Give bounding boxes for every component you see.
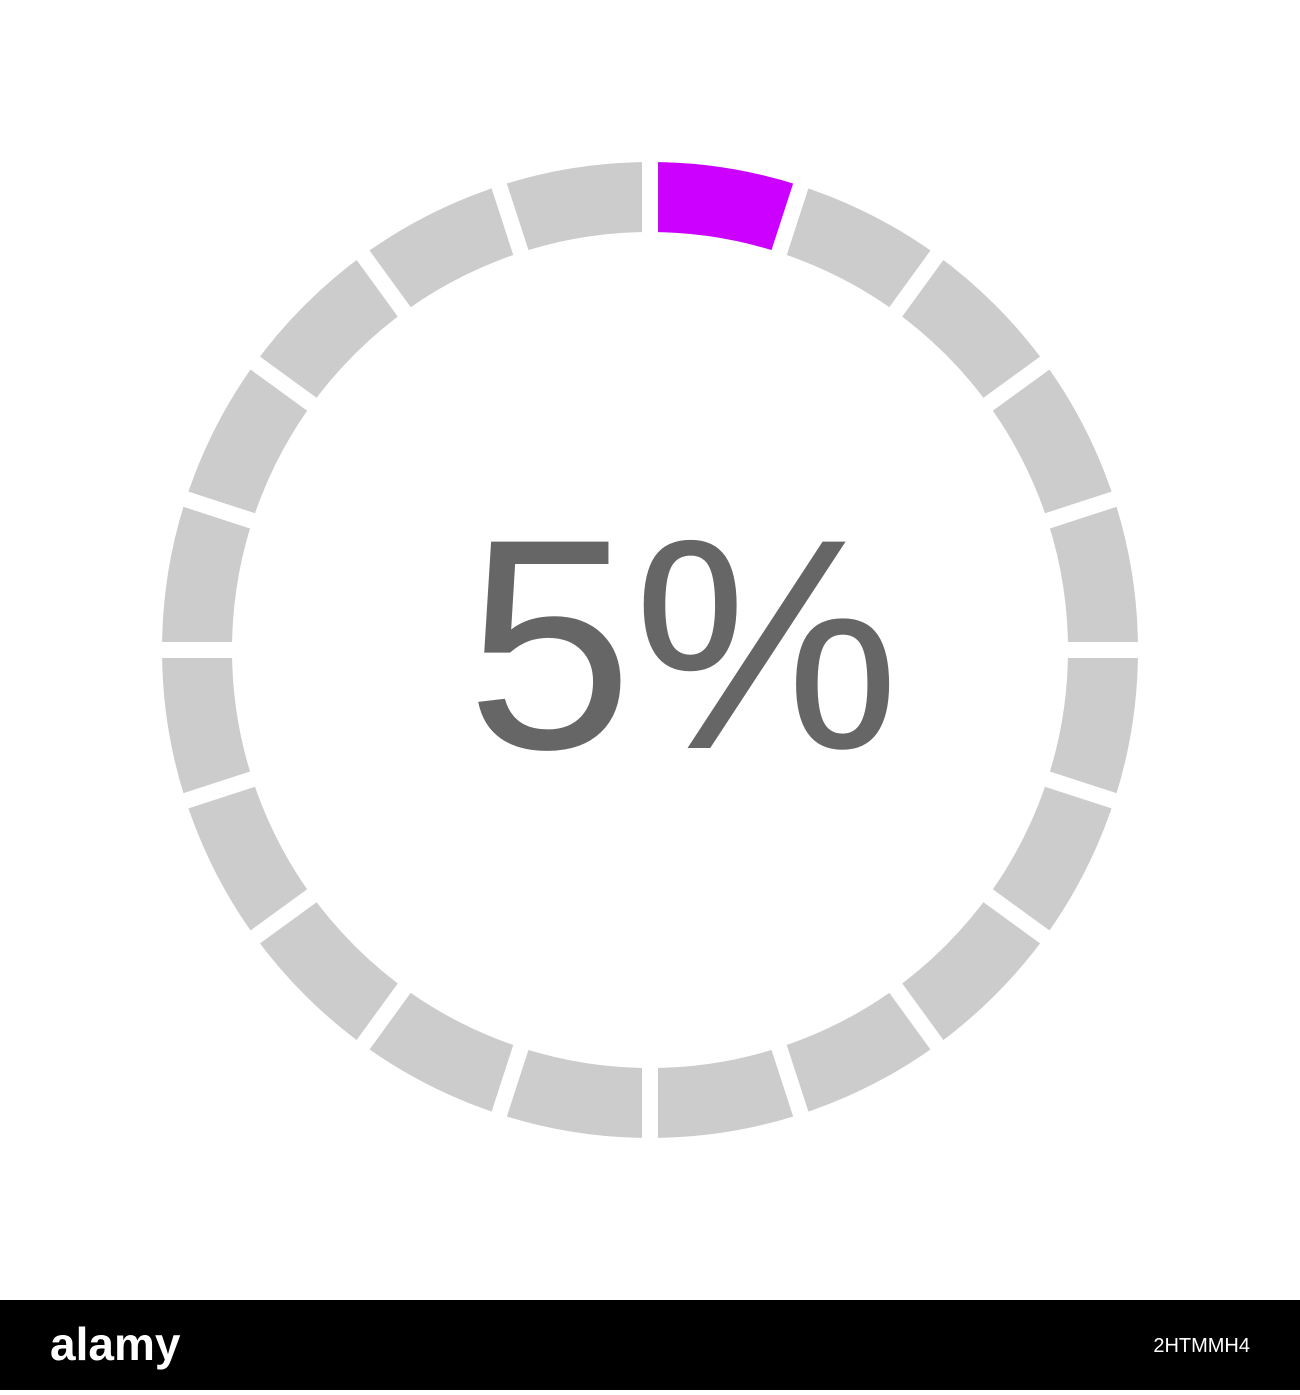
footer bar [0,1300,1300,1390]
progress segment [650,197,790,219]
ring track [197,197,1103,1103]
logo text: alamy [50,1318,181,1370]
percentage label: 5% [466,476,900,812]
progress ring [150,150,1150,1150]
image id: 2HTMMH4 [1153,1335,1250,1357]
